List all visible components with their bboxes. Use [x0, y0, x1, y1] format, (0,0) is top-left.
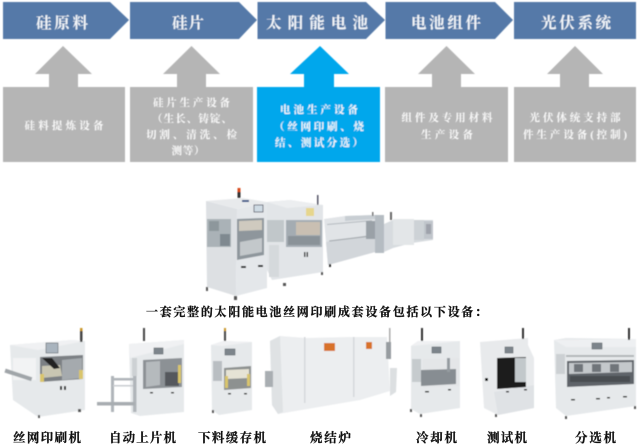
chevron: 硅片	[130, 2, 257, 39]
chevron: 太阳能电池: 太阳能电池	[266, 13, 368, 32]
panel: 电池生产设备 highlighted	[257, 87, 380, 162]
header: 光伏系统	[514, 2, 636, 39]
label: 丝网印刷机: 丝网印刷机	[13, 430, 81, 445]
panel: 组件及专用材料生产设备	[385, 87, 508, 162]
label: 分选机: 分选机	[575, 430, 616, 445]
header: 光伏系统: 光伏系统	[541, 13, 612, 32]
panel: 组件及专用材料生产设备: 生产设备	[421, 128, 474, 141]
machine B	[267, 200, 323, 280]
machine: 下料缓存机	[211, 328, 252, 415]
label: 测试机: 测试机	[487, 430, 527, 445]
machine: 丝网印刷机	[4, 328, 85, 418]
chevron: 电池组件: 电池组件	[411, 13, 481, 32]
label: 下料缓存机: 下料缓存机	[198, 430, 266, 445]
machine labels	[13, 430, 616, 445]
chevron: 硅原料	[3, 2, 129, 39]
arrow: 光伏系统 up	[547, 46, 603, 87]
middle tunnel section	[324, 215, 375, 265]
panel: 光伏体统支持部件生产设备: 件生产设备(控制)	[523, 128, 628, 141]
chevron: 硅片: 硅片	[172, 13, 204, 32]
panel: 硅片生产设备: 测等）	[172, 144, 204, 157]
value chain header row	[3, 2, 636, 39]
panel: 电池生产设备 highlighted: （丝网印刷、烧	[274, 120, 364, 133]
machine: 分选机	[554, 328, 636, 419]
arrow: 硅片 up	[163, 46, 220, 87]
chevron: 太阳能电池	[258, 2, 385, 39]
panel: 电池生产设备 highlighted: 电池生产设备	[280, 103, 358, 116]
heading: full equipment set: 一套完整的太阳能电池丝网印刷成套设备包括以下设备：	[146, 304, 487, 319]
panel: 光伏体统支持部件生产设备	[514, 87, 636, 162]
panel: 硅片生产设备: 硅片生产设备	[153, 96, 230, 109]
label: 冷却机: 冷却机	[416, 430, 457, 445]
arrow: 电池组件 up	[418, 46, 475, 87]
panel: 硅料提炼设备: 硅料提炼设备	[24, 119, 104, 132]
arrow: 太阳能电池 up highlighted	[290, 46, 349, 87]
far end of line	[384, 220, 433, 252]
panel: 硅片生产设备: （生长、铸锭、	[152, 112, 232, 125]
machine A	[206, 198, 267, 209]
panel: 硅料提炼设备	[3, 87, 125, 162]
machine: 自动上片机	[97, 328, 184, 416]
machine: 测试机	[480, 328, 534, 417]
label: 自动上片机: 自动上片机	[109, 430, 176, 445]
arrow: 硅原料 up	[35, 46, 92, 87]
label: 烧结炉: 烧结炉	[309, 430, 351, 445]
panel: 电池生产设备 highlighted: 结、测试分选）	[275, 136, 363, 149]
production line photo illustration	[206, 188, 433, 300]
panel: 组件及专用材料生产设备: 组件及专用材料	[402, 111, 493, 124]
equipment columns	[3, 46, 636, 162]
panel: 硅片生产设备	[130, 87, 253, 162]
panel: 硅片生产设备: 切割、清洗、检	[146, 128, 238, 141]
chevron: 硅原料: 硅原料	[36, 13, 88, 32]
panel: 光伏体统支持部件生产设备: 光伏体统支持部	[530, 111, 621, 124]
machines row	[4, 328, 636, 419]
machine: 烧结炉	[265, 328, 397, 414]
chevron: 电池组件	[386, 2, 513, 39]
machine: 冷却机	[410, 328, 460, 417]
